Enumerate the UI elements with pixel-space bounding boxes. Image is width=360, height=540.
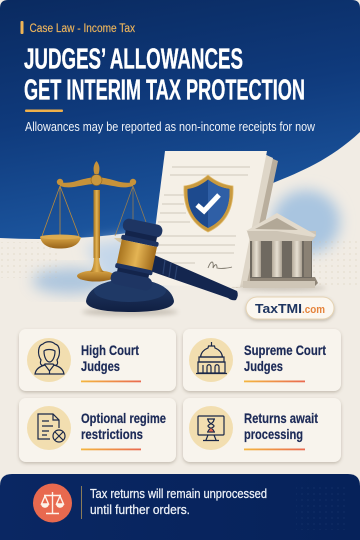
subtitle: Allowances may be reported as non-income receipts for now	[25, 120, 316, 134]
text	[244, 410, 318, 442]
icon: shield with check	[184, 175, 233, 232]
footer text	[90, 486, 267, 517]
icon: domed court	[189, 338, 233, 382]
title underline	[25, 110, 63, 112]
card: High Court Judges	[19, 329, 176, 391]
text: Judges	[244, 358, 283, 374]
text: High Court	[81, 342, 139, 358]
label: case law: Case Law - Income Tax	[30, 23, 135, 35]
footer banner	[0, 474, 360, 540]
card: Supreme Court Judges	[183, 329, 341, 391]
decorative watercolor blobs	[0, 190, 360, 294]
blue header background with curved edge	[0, 0, 360, 239]
logo badge: TaxTMI	[255, 301, 302, 316]
title: JUDGES’ ALLOWANCES	[24, 44, 243, 76]
footer text: Tax returns will remain unprocessed	[90, 486, 267, 501]
text: Supreme Court	[244, 342, 326, 358]
icon: gavel	[82, 217, 238, 316]
icon: courthouse	[238, 213, 326, 291]
title	[24, 44, 305, 106]
icon: judge in wig	[27, 338, 71, 382]
text: Returns await	[244, 410, 318, 426]
logo badge: .com	[302, 304, 325, 316]
icon: scales of justice	[40, 161, 146, 282]
logo badge	[246, 297, 334, 319]
illustration: document stack	[148, 151, 278, 288]
footer text: until further orders.	[90, 502, 190, 517]
text: Optional regime	[81, 410, 166, 426]
text	[81, 342, 139, 374]
text	[244, 342, 326, 374]
text: processing	[244, 426, 303, 442]
text: Judges	[81, 358, 120, 374]
icon: scales badge	[33, 484, 72, 522]
icon: monitor with hourglass	[189, 406, 233, 450]
text	[81, 410, 166, 442]
card: Returns await processing	[183, 398, 341, 462]
icon: document with cross	[27, 406, 71, 450]
card: Optional regime restrictions	[19, 398, 176, 462]
text: restrictions	[81, 426, 143, 442]
